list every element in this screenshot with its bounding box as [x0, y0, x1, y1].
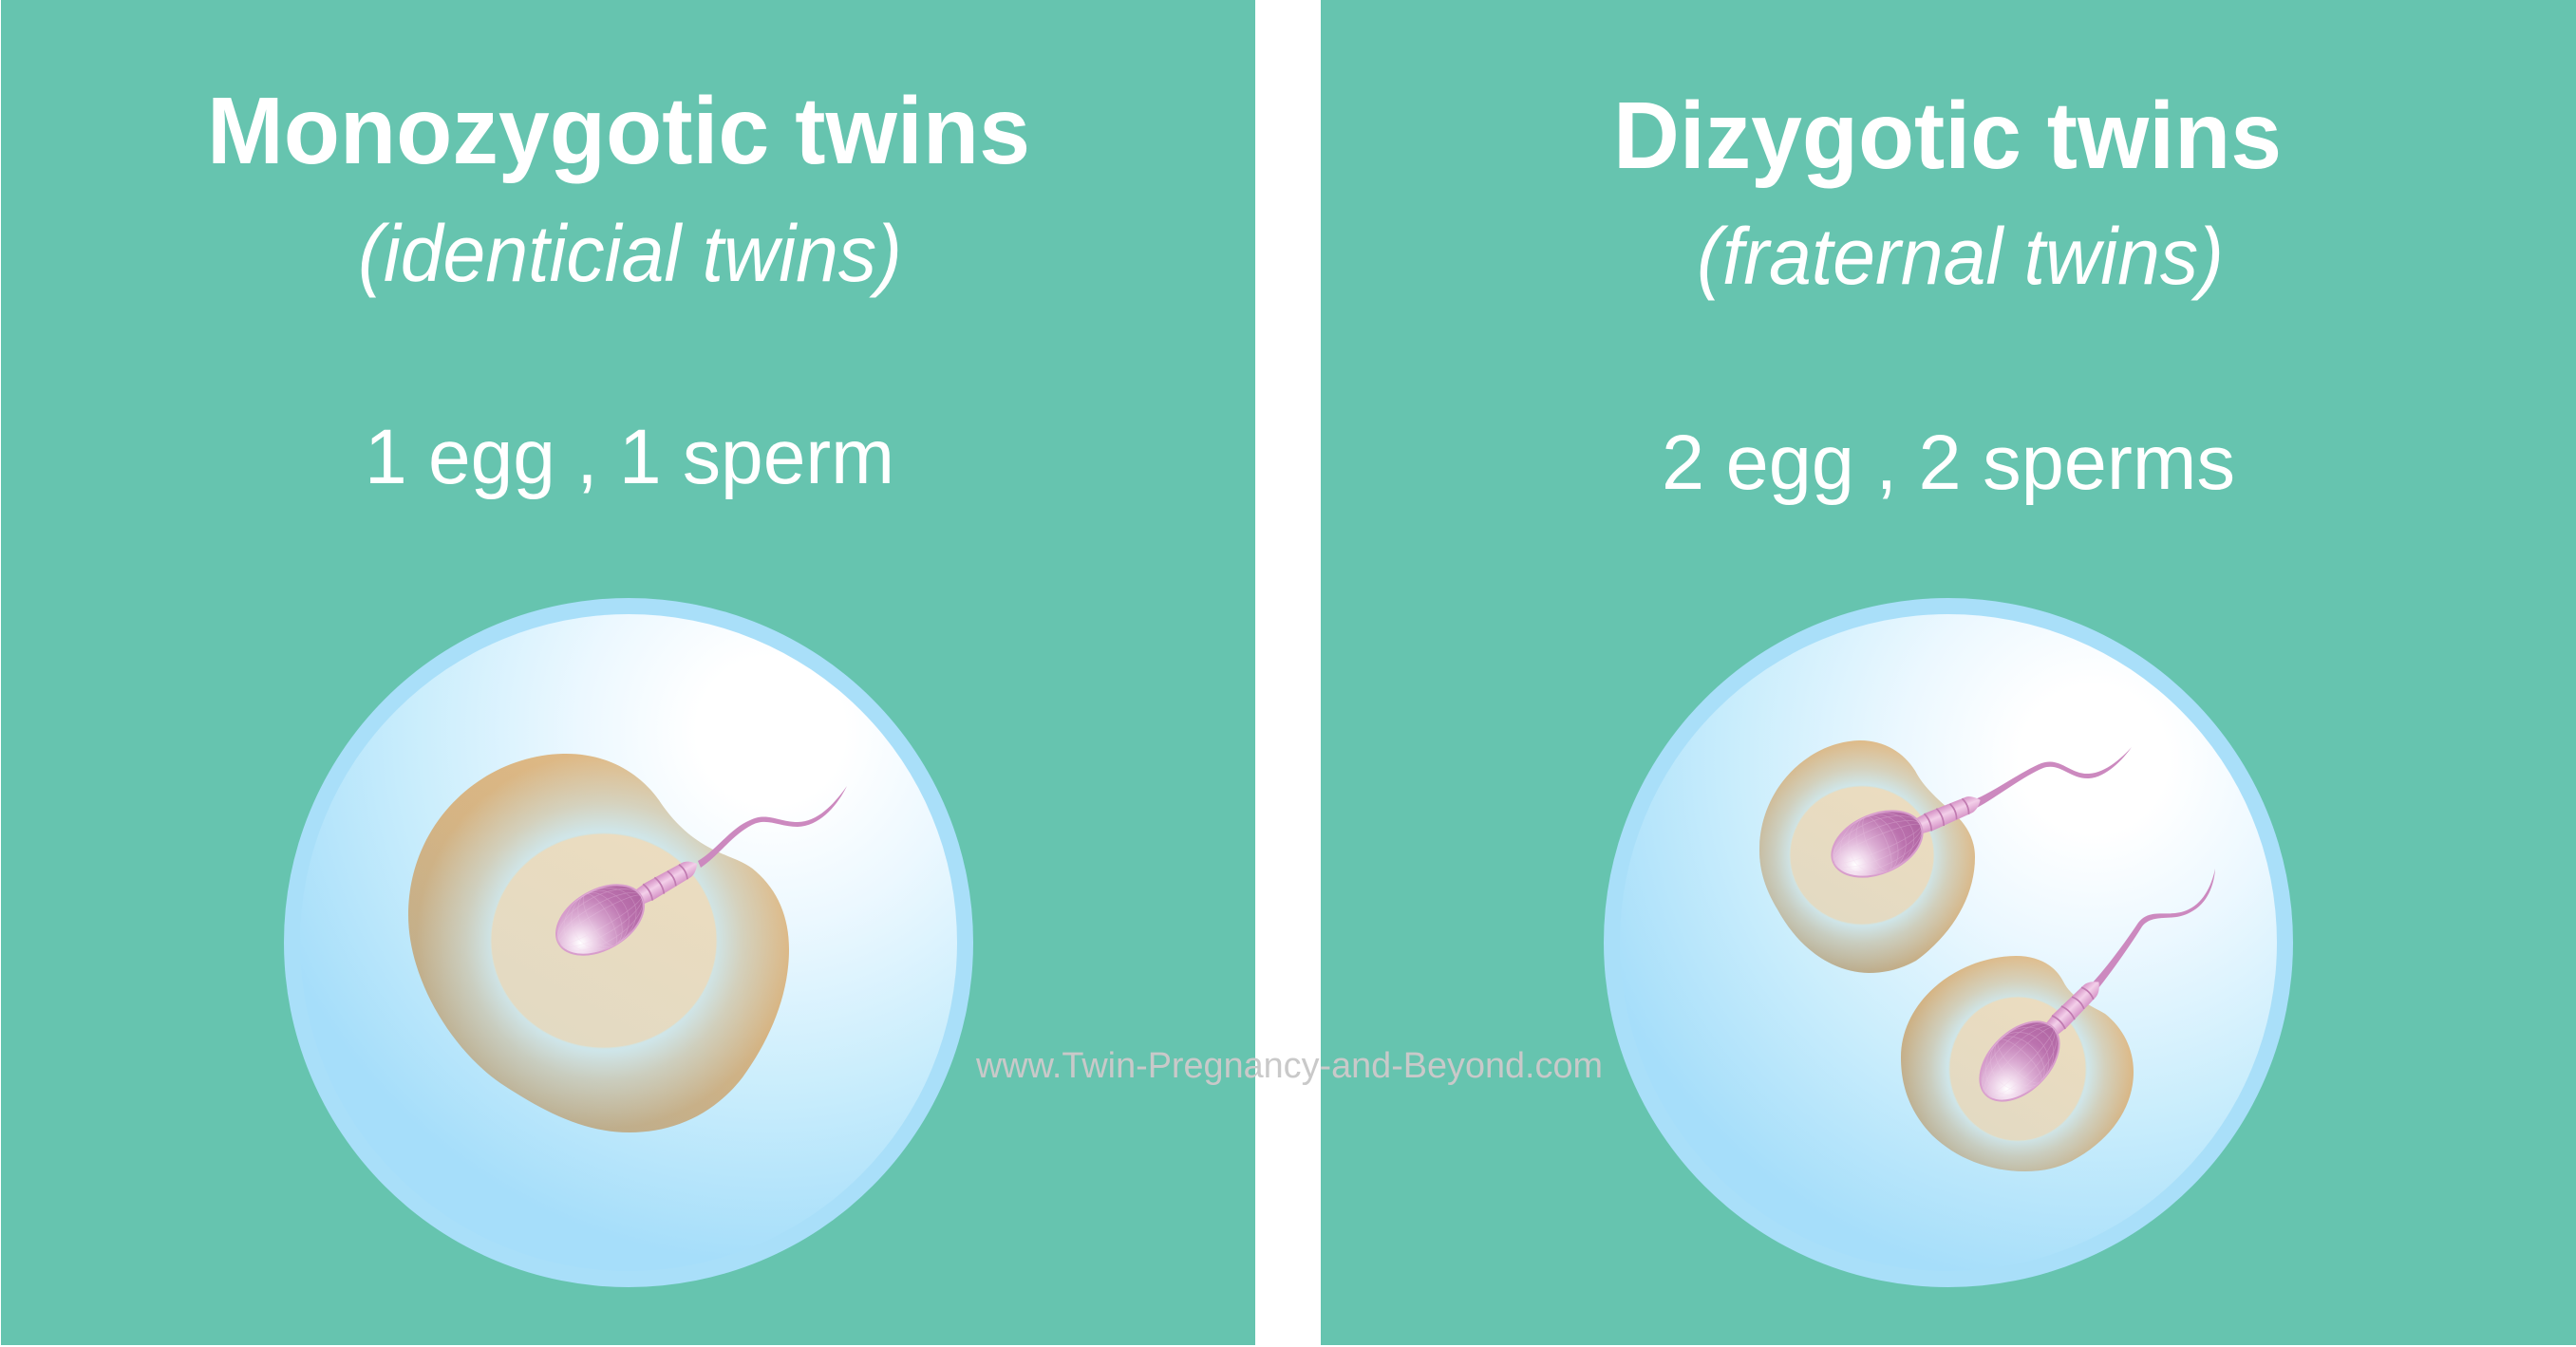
title: dizygotic twins: Dizygotic twins [1613, 83, 2282, 189]
panel: monozygotic twins [1, 0, 1255, 1345]
illustration: single egg with one sperm [284, 598, 973, 1287]
subtitle: identical twins: (identicial twins) [358, 209, 902, 298]
egg cell: lower [1901, 956, 2134, 1171]
sperm: lower [1965, 869, 2215, 1115]
subtitle: fraternal twins: (fraternal twins) [1697, 212, 2224, 301]
illustration: two eggs with two sperm [1604, 598, 2293, 1287]
text: 2 egg, 2 sperms: 2 egg , 2 sperms [1662, 420, 2235, 506]
sperm [544, 786, 847, 969]
watermark: www.Twin-Pregnancy-and-Beyond.com [975, 1046, 1603, 1086]
panel: dizygotic twins [1321, 0, 2576, 1345]
egg cell: upper [1759, 740, 1975, 973]
text: 1 egg, 1 sperm: 1 egg , 1 sperm [365, 414, 894, 500]
egg cell [408, 754, 789, 1132]
title: monozygotic twins: Monozygotic twins [207, 78, 1030, 184]
sperm: upper [1822, 747, 2132, 889]
